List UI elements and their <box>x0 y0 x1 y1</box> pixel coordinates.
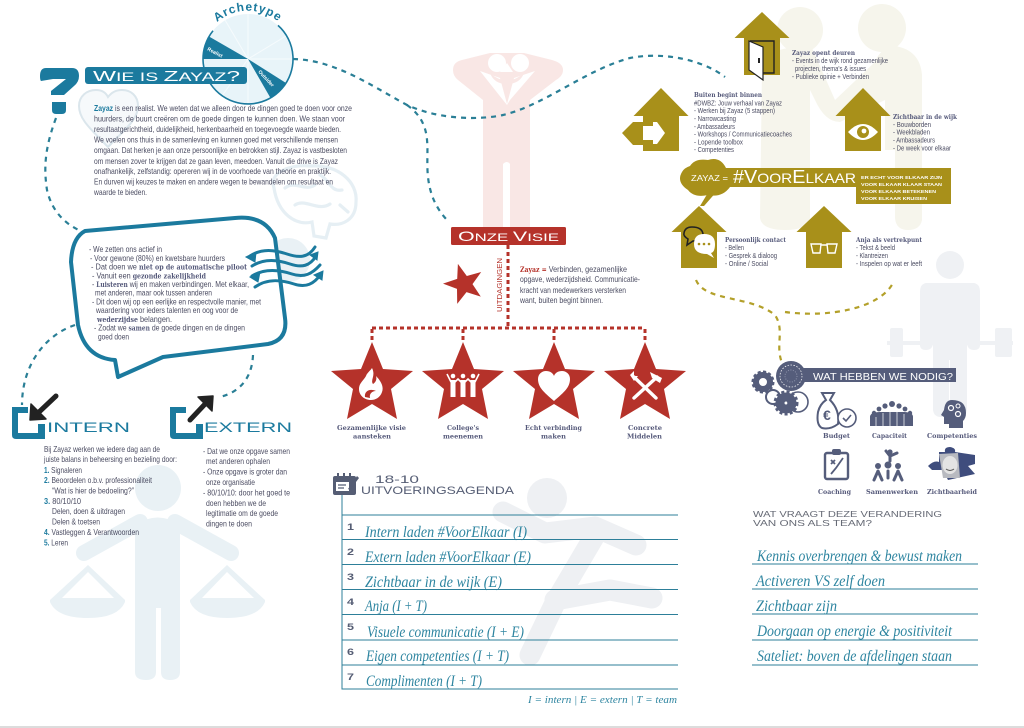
list: team verandering: Activeren VS zelf doen <box>755 573 885 590</box>
text block: zichtbaar in de wijk: - De week voor elkaar <box>893 144 951 152</box>
text block: persoonlijk contact: - Gesprek & dialoog <box>725 251 777 260</box>
text block: intern: juiste balans in beheersing en bezieling door: <box>43 455 177 464</box>
icon: postmark waves <box>246 247 323 287</box>
banner: voorelkaar: #VOORELKAAR <box>733 167 856 187</box>
text block: intern: Delen & toetsen <box>52 518 100 526</box>
star: concrete middelen: Middelen <box>627 432 662 440</box>
text block: bubble: - Vanuit een gezonde zakelijkheid <box>92 272 206 280</box>
table: agenda: 7 <box>347 672 354 682</box>
table: agenda: Intern laden #VoorElkaar (I) <box>364 524 527 541</box>
ghost circle behind stamp <box>266 238 310 282</box>
icon: budget: Budget <box>823 432 851 440</box>
icon: coaching <box>818 449 851 496</box>
text block: deuren <box>792 49 888 81</box>
label: uitdagingen: UITDAGINGEN <box>497 258 504 312</box>
house: chat <box>672 206 726 268</box>
ghost figure: thinking person <box>453 53 563 227</box>
text block: buiten begint binnen <box>694 91 792 154</box>
table: agenda <box>342 495 678 690</box>
text block: intern: Bij Zayaz werken we iedere dag aan de <box>44 445 160 454</box>
text block: intern: “Wat is hier de bedoeling?” <box>52 486 134 496</box>
connector: dashed route teal <box>22 56 725 405</box>
text block: bubble: met anderen, maar ook tussen anderen <box>95 288 212 298</box>
pie: archetype: Outsider <box>257 69 275 88</box>
table: agenda: Anja (I + T) <box>364 598 427 615</box>
text block: bubble: waardering voor ieders talenten en oog voor de <box>95 306 238 315</box>
text block: extern: - Onze opgave is groter dan <box>203 468 287 476</box>
text block: onze visie: Zayaz = Verbinden, gezamenlijke <box>520 265 627 274</box>
pie: archetype <box>202 2 294 105</box>
heading: uitvoeringsagenda <box>361 474 515 497</box>
text block: intern: 3. 80/10/10 <box>44 497 81 506</box>
icon: budget <box>818 393 856 440</box>
list: team verandering: Zichtbaar zijn <box>756 598 837 615</box>
list: team verandering: Sateliet: boven de afdelingen staan <box>757 648 952 665</box>
heading: uitvoeringsagenda: 18-10 <box>375 474 419 486</box>
heading: intern <box>12 396 130 439</box>
ghost figures: handshake <box>760 4 922 230</box>
banner: voorelkaar: VOOR ELKAAR BETEKENEN <box>861 189 937 194</box>
star: concrete middelen <box>604 342 686 440</box>
text block: extern: legitimatie om de goede <box>206 509 278 518</box>
icon: competenties <box>927 400 977 440</box>
text block: extern <box>203 447 290 528</box>
heading: wat vraagt deze verandering: VAN ONS ALS TEAM? <box>753 518 872 528</box>
text block: persoonlijk contact <box>725 236 787 268</box>
table: agenda: Extern laden #VoorElkaar (E) <box>364 549 531 566</box>
text block: intro zayaz: onafhankelijk, zelfstandig: opereren wij in de voorhoede van theorie en praktijk. <box>94 167 331 176</box>
heading banner: wie is zayaz: W IE IS Z AYAZ ? <box>93 68 240 85</box>
ghost figure: runner <box>503 478 652 655</box>
heading banner: wat hebben we nodig <box>776 361 956 391</box>
text block: intern: 1. Signaleren <box>44 466 82 475</box>
star: collega's: College's <box>447 424 479 432</box>
text block: intern: 2. Beoordelen o.b.v. professionaliteit <box>44 476 153 485</box>
list: team verandering: Doorgaan op energie & positiviteit <box>756 623 952 640</box>
star: collega's <box>422 342 504 440</box>
banner: voorelkaar: VOOR ELKAAR KLAAR STAAN <box>861 182 943 187</box>
text block: intern <box>43 445 177 548</box>
text block: anja: Anja als vertrekpunt <box>855 236 923 244</box>
heading banner: onze visie <box>451 227 566 245</box>
speech bubble <box>71 218 285 377</box>
text block: deuren: Zayaz opent deuren <box>792 49 855 57</box>
text block: intro zayaz <box>93 104 352 197</box>
text block: zichtbaar in de wijk: - Weekbladen <box>893 128 930 136</box>
table: agenda: Zichtbaar in de wijk (E) <box>365 574 502 591</box>
text block: persoonlijk contact: Persoonlijk contact <box>725 236 787 244</box>
ghost icon: brain <box>273 166 356 238</box>
table: agenda: Complimenten (I + T) <box>366 673 482 690</box>
text block: extern: onze organisatie <box>206 478 255 487</box>
banner: voorelkaar: ER ECHT VOOR ELKAAR ZIJN <box>861 175 943 180</box>
table: agenda: Eigen competenties (I + T) <box>365 648 509 665</box>
text block: bubble: - Dit doen wij op een eerlijke en respectvolle manier, met <box>92 298 262 306</box>
icon: capaciteit: Capaciteit <box>872 432 908 440</box>
text block: intro zayaz: omgaan. Dat herken je aan onze persoonlijke en betrokken stijl. Zayaz is vastbesloten <box>94 146 347 155</box>
text block: buiten begint binnen: - Ambassadeurs <box>694 122 735 131</box>
text block: extern: met anderen ophalen <box>206 457 270 466</box>
text block: intro zayaz: om mensen zover te krijgen dat ze gaan leven, meedoen. Vanuit die drive is Zayaz <box>94 157 338 166</box>
text block: extern: doen hebben we de <box>206 499 266 508</box>
text block: buiten begint binnen: - Werken bij Zayaz (5 stappen) <box>694 106 775 115</box>
table: agenda: 2 <box>347 547 354 557</box>
icon: samenwerken <box>866 449 918 496</box>
table: agenda: Visuele communicatie (I + E) <box>367 624 524 641</box>
icon: small star <box>443 264 481 304</box>
text block: zichtbaar in de wijk <box>893 113 957 152</box>
text block: deuren: - Events in de wijk rond gezamenlijke <box>792 56 888 65</box>
icon: agenda <box>333 473 359 495</box>
text block: bubble: - Dat doen we niet op de automatische piloot <box>91 262 248 272</box>
heading banner: onze visie: O NZE V ISIE <box>458 228 559 244</box>
star: gezamenlijke visie: Gezamenlijke visie <box>337 424 406 432</box>
banner: voorelkaar: VOOR ELKAAR KRUISEN <box>861 196 928 201</box>
icon: coaching: Coaching <box>818 488 851 496</box>
text block: buiten begint binnen: - Narrowcasting <box>694 114 736 123</box>
star: echt verbinding: Echt verbinding <box>525 424 582 432</box>
icon: zichtbaarheid puzzle photo: Zichtbaarheid <box>927 488 977 496</box>
icon: budget: € <box>823 407 831 423</box>
text block: intro zayaz: We voelen ons thuis in de samenleving en kunnen goed met verschillende mensen <box>94 136 338 144</box>
banner: voorelkaar <box>680 159 951 206</box>
heading: extern: EXTERN <box>204 419 292 435</box>
text block: bubble: goed doen <box>98 332 129 342</box>
table: agenda: 1 <box>347 522 354 532</box>
text block: bubble: - Zodat we samen de goede dingen en de dingen <box>94 324 245 332</box>
heading: intern: INTERN <box>47 419 130 435</box>
text block: anja: - Klantreizen <box>856 251 888 260</box>
star: concrete middelen: Concrete <box>628 424 662 432</box>
text block: intro zayaz: Zayaz is een realist. We weten dat we alleen door de dingen goed te doen voor onze <box>94 104 352 113</box>
text block: extern: dingen te doen <box>206 520 252 528</box>
star: gezamenlijke visie: aansteken <box>353 432 391 440</box>
text block: intro zayaz: En durven wij keuzes te maken en andere wegen te bewandelen om resultaat en <box>94 178 333 186</box>
text block: persoonlijk contact: - Online / Social <box>725 259 768 268</box>
icon: question mark <box>40 68 79 114</box>
icon: capaciteit <box>870 401 913 440</box>
text block: bubble: - Voor gewone (80%) en kwetsbare huurders <box>90 254 225 263</box>
legend: agenda: I = intern | E = extern | T = team <box>527 695 677 706</box>
house: puzzel <box>622 88 688 151</box>
text block: onze visie: opgave, wederzijdsheid. Communicatie- <box>520 275 640 284</box>
heading banner: wat hebben we nodig: WAT HEBBEN WE NODIG? <box>813 372 953 383</box>
table: agenda: 5 <box>347 622 354 632</box>
star: echt verbinding: maken <box>541 432 566 440</box>
text block: onze visie: kracht van medewerkers versterken <box>520 286 626 295</box>
house: bril <box>796 206 852 268</box>
text block: buiten begint binnen: - Competenties <box>694 145 734 154</box>
text block: bubble: - Luisteren wij en maken verbindingen. Met elkaar, <box>92 280 249 289</box>
text block: zichtbaar in de wijk: - Ambassadeurs <box>893 136 935 144</box>
text block: intro zayaz: huurders, de buurt creëren om de goede dingen te kunnen doen. We staan voor <box>94 114 345 124</box>
text block: buiten begint binnen: - Workshops / Communicatiecoaches <box>694 130 792 138</box>
text block: deuren: projecten, thema's & issues <box>795 64 866 73</box>
text block: anja <box>855 236 923 268</box>
text block: zichtbaar in de wijk: Zichtbaar in de wijk <box>893 113 957 121</box>
text block: buiten begint binnen: #DWBZ: Jouw verhaal van Zayaz <box>694 98 782 108</box>
ghost icon: heart <box>79 90 138 147</box>
star: gezamenlijke visie <box>331 342 413 440</box>
text block: intro zayaz: waarde te bieden. <box>93 188 147 197</box>
text block: extern: - Dat we onze opgave samen <box>203 447 290 456</box>
heading: wat vraagt deze verandering: WAT VRAAGT DEZE VERANDERING <box>753 509 942 519</box>
text block: onze visie <box>519 265 640 305</box>
house: oog <box>836 88 890 151</box>
pie: archetype: Archetype <box>214 2 280 22</box>
table: agenda: 6 <box>347 647 354 657</box>
banner: voorelkaar: ZAYAZ = <box>691 174 728 183</box>
text block: zichtbaar in de wijk: - Bouwborden <box>893 120 931 129</box>
connector: dashed route olive <box>696 280 893 363</box>
ghost figure: weightlifter <box>887 251 1013 417</box>
text block: intern: Delen, doen & uitdragen <box>52 507 125 516</box>
icon: gears <box>753 372 808 414</box>
pie: archetype: Realist <box>206 46 224 60</box>
icon: competenties: Competenties <box>927 432 977 440</box>
text block: anja: - Inspelen op wat er leeft <box>856 259 922 268</box>
ghost figure: balance person <box>50 465 265 680</box>
text block: persoonlijk contact: - Bellen <box>725 243 744 252</box>
house: deuren <box>734 12 790 80</box>
text block: buiten begint binnen: Buiten begint binnen <box>694 91 762 99</box>
text block: intern: 4. Vastleggen & Verantwoorden <box>44 528 139 537</box>
text block: intro zayaz: resultaatgerichtheid, duidelijkheid, herkenbaarheid en toegevoegde waarde bieden. <box>94 125 341 134</box>
table: agenda: 3 <box>347 572 354 582</box>
star: echt verbinding <box>513 342 595 440</box>
heading: extern <box>170 396 292 439</box>
icon: zichtbaarheid puzzle photo <box>927 447 977 496</box>
icon: samenwerken: Samenwerken <box>866 488 918 496</box>
star: collega's: meenemen <box>443 432 483 440</box>
heading: wat vraagt deze verandering <box>753 509 942 528</box>
text block: intern: 5. Leren <box>44 538 68 548</box>
connector: vision tree <box>372 245 645 340</box>
text block: onze visie: want, buiten begint binnen. <box>519 296 603 305</box>
text block: anja: - Tekst & beeld <box>856 243 895 252</box>
list: team verandering: Kennis overbrengen & bewust maken <box>756 548 962 565</box>
table: agenda: 4 <box>347 597 354 607</box>
text block: bubble: - We zetten ons actief in <box>89 245 162 254</box>
text block: extern: - 80/10/10: door het goed te <box>203 488 290 498</box>
text block: bubble <box>89 245 262 342</box>
text block: bubble: wederzijdse belangen. <box>96 315 172 324</box>
heading: uitvoeringsagenda: UITVOERINGSAGENDA <box>361 485 515 497</box>
text block: deuren: - Publieke opinie + Verbinden <box>792 72 869 81</box>
text block: buiten begint binnen: - Lopende toolbox <box>694 138 743 146</box>
list: team verandering <box>752 548 978 665</box>
